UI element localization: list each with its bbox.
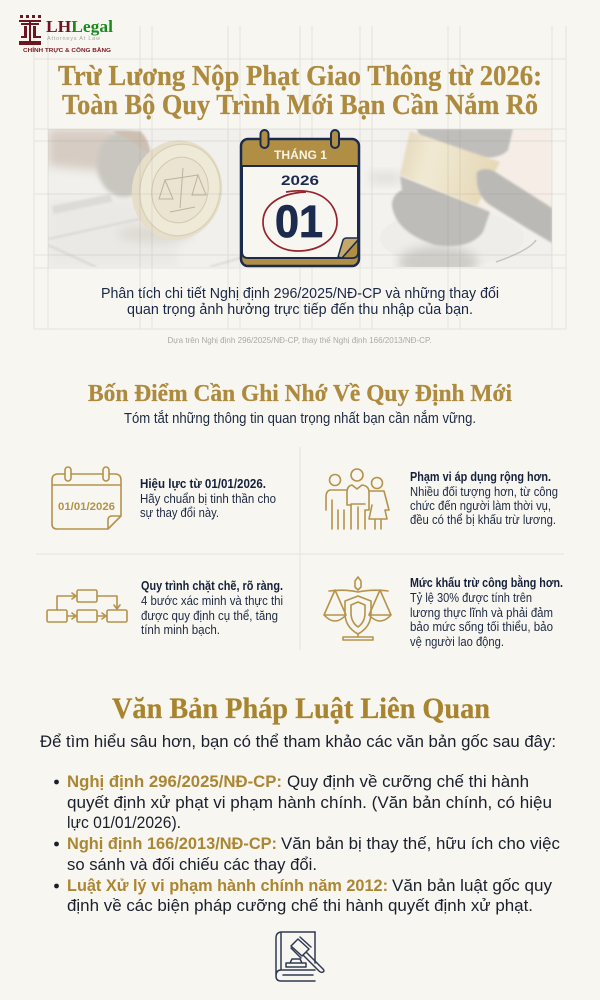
title <box>58 61 542 121</box>
gavel <box>370 129 552 278</box>
title: Trừ Lương Nộp Phạt Giao Thông từ 2026: <box>58 61 542 92</box>
decorative grid <box>34 26 566 329</box>
panel: strict process: được quy định cụ thể, tăng <box>141 609 278 623</box>
logo: Attorneys At Law <box>47 36 100 42</box>
icon: calendar: 01/01/2026 <box>58 501 115 513</box>
stamp seal <box>132 140 222 240</box>
list: legal documents: Nghị định 296/2025/NĐ-CP: <box>67 772 282 791</box>
panel: strict process <box>47 579 283 637</box>
panel: effective date: sự thay đổi này. <box>140 506 219 520</box>
icon: scales with shield <box>324 577 391 640</box>
intro text <box>101 285 499 318</box>
panel: broader scope: đều có thể bị khấu trừ lương. <box>410 513 556 527</box>
list: legal documents: Văn bản luật gốc quy <box>392 876 553 895</box>
panel: broader scope: Nhiều đối tượng hơn, từ công <box>410 485 558 499</box>
panel: broader scope <box>326 469 558 529</box>
panel: fair deduction <box>324 575 563 649</box>
list: legal documents: so sánh và đối chiếu các thay đổi. <box>67 855 317 874</box>
icon: calendar January 2026 <box>241 130 359 266</box>
list: legal documents: quyết định xử phạt vi phạm hành chính. (Văn bản chính, có hiệu <box>67 793 552 812</box>
panel: fair deduction: lương thực lĩnh và phải đảm <box>410 606 553 620</box>
list: legal documents: Nghị định 166/2013/NĐ-CP: <box>67 834 277 853</box>
icon: calendar <box>52 467 121 529</box>
heading: legal documents: Văn Bản Pháp Luật Liên Quan <box>112 692 490 725</box>
panel: strict process: tính minh bạch. <box>141 623 220 637</box>
title: Toàn Bộ Quy Trình Mới Bạn Cần Nắm Rõ <box>62 90 538 121</box>
list: legal documents: Văn bản bị thay thế, hữu ích cho việc <box>281 834 560 853</box>
red circle mark <box>263 191 337 251</box>
logo: CHÍNH TRỰC & CÔNG BẰNG <box>23 46 112 54</box>
list: legal documents: lực 01/01/2026). <box>67 813 181 832</box>
list: legal documents: Quy định về cưỡng chế thi hành <box>287 772 529 791</box>
paper document <box>48 194 240 267</box>
list: legal documents: Luật Xử lý vi phạm hành chính năm 2012: <box>67 876 388 895</box>
icon: law book and gavel <box>276 932 324 981</box>
icon: family <box>326 469 389 529</box>
intro text: Phân tích chi tiết Nghị định 296/2025/NĐ-CP và những thay đổi <box>101 285 499 302</box>
page fold <box>338 238 358 258</box>
source note: Dựa trên Nghị định 296/2025/NĐ-CP, thay thế Nghị định 166/2013/NĐ-CP. <box>168 335 432 345</box>
panel: fair deduction: Tỷ lệ 30% được tính trên <box>410 591 532 605</box>
panel: fair deduction: Mức khấu trừ công bằng hơn. <box>410 575 563 590</box>
logo wordmark: LHLegal <box>46 17 113 36</box>
icon: flowchart <box>47 590 127 622</box>
icon: calendar January 2026: 2026 <box>281 172 319 188</box>
panel: strict process: 4 bước xác minh và thực thi <box>141 594 283 608</box>
intro: legal documents: Để tìm hiểu sâu hơn, bạn có thể tham khảo các văn bản gốc sau đây: <box>40 732 556 751</box>
logo <box>19 15 113 54</box>
subheading: four points: Tóm tắt những thông tin quan trọng nhất bạn cần nắm vững. <box>124 410 476 427</box>
icon: calendar January 2026: THÁNG 1 <box>274 147 327 162</box>
icon: calendar January 2026: 01 <box>275 196 323 247</box>
hero photo: wax stamp and gavel <box>48 129 552 278</box>
panel: fair deduction: vệ người lao động. <box>410 635 504 649</box>
list: legal documents: định về các biện pháp cưỡng chế thi hành quyết định xử phạt. <box>67 896 533 915</box>
heading: four points: Bốn Điểm Cần Ghi Nhớ Về Quy Định Mới <box>88 381 512 407</box>
list: legal documents <box>54 772 560 915</box>
panel: effective date: Hiệu lực từ 01/01/2026. <box>140 477 266 491</box>
panel: effective date <box>52 467 276 529</box>
panel: effective date: Hãy chuẩn bị tinh thần cho <box>140 492 276 506</box>
panel: fair deduction: bảo mức sống tối thiểu, bảo <box>410 620 553 634</box>
panel: broader scope: chức đến người làm thời vụ, <box>410 499 551 513</box>
intro text: quan trọng ảnh hưởng trực tiếp đến thu nhập của bạn. <box>127 301 473 318</box>
panel: broader scope: Phạm vi áp dụng rộng hơn. <box>410 470 551 484</box>
stamp handle <box>48 129 151 197</box>
icon: logo mark <box>19 15 41 45</box>
panel: strict process: Quy trình chặt chẽ, rõ ràng. <box>141 579 283 593</box>
